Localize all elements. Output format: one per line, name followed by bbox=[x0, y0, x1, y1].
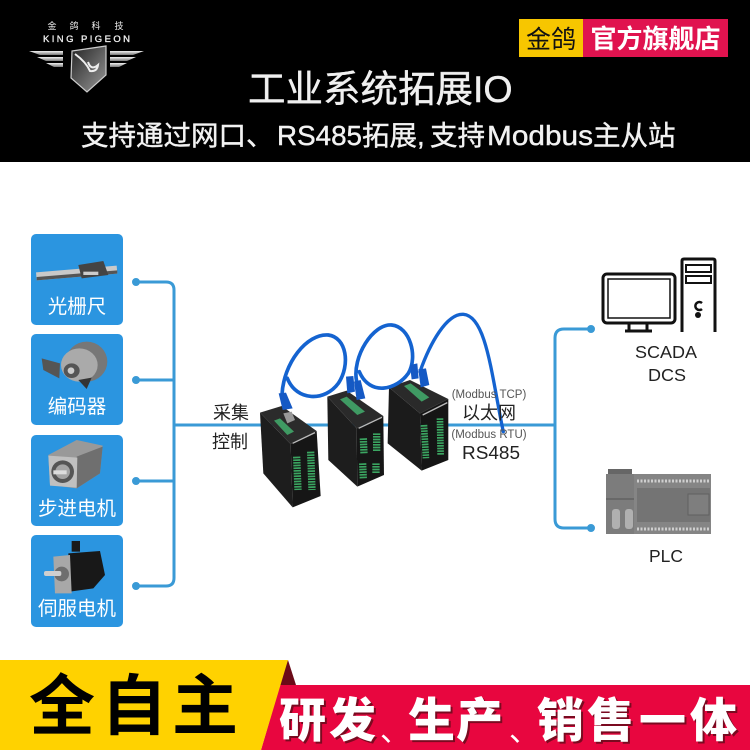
subtitle: 拓展, bbox=[362, 120, 425, 151]
cable connectors bbox=[279, 363, 429, 410]
slogan: R&D, production, sales bbox=[279, 694, 739, 749]
header band bbox=[0, 0, 750, 162]
subtitle: 支持通过网口、 bbox=[81, 120, 274, 151]
logo: King Pigeon bbox=[29, 20, 144, 92]
subtitle: 支持 bbox=[430, 120, 485, 151]
slogan: R&D, production, sales: 销售一体 bbox=[539, 696, 739, 749]
logo: King Pigeon: 金 bbox=[47, 20, 57, 31]
label: DCS: DCS bbox=[648, 365, 686, 385]
icon: SCADA computer bbox=[603, 259, 715, 332]
slogan: R&D, production, sales: 生产 bbox=[410, 696, 505, 749]
tile: servo motor: 伺服电机 bbox=[38, 598, 116, 620]
badge: official flagship store bbox=[519, 19, 728, 57]
logo: King Pigeon: 技 bbox=[114, 20, 124, 31]
blue cables bbox=[282, 314, 503, 432]
subtitle: 主从站 bbox=[593, 120, 676, 151]
tile: encoder bbox=[31, 334, 123, 425]
slogan: fully independent: 全自主 bbox=[29, 669, 238, 743]
slogan: R&D, production, sales: 、 bbox=[380, 715, 410, 748]
tile: grating scale: 光栅尺 bbox=[48, 296, 106, 318]
IO modules with blue network cables bbox=[260, 314, 503, 507]
slogan: R&D, production, sales: 销售一体 bbox=[537, 694, 737, 747]
left connector bracket bbox=[134, 280, 174, 588]
tile: grating scale bbox=[31, 234, 123, 325]
subtitle: Modbus bbox=[487, 120, 593, 151]
module 1 bbox=[260, 406, 321, 507]
slogan: R&D, production, sales: 研发 bbox=[281, 696, 378, 749]
tile: servo motor bbox=[31, 535, 123, 627]
bottom banner: red strip bbox=[261, 660, 750, 750]
module 3 bbox=[388, 380, 448, 471]
tile: stepper motor bbox=[31, 435, 123, 526]
label: acquisition: 采集 bbox=[213, 403, 249, 423]
badge: official flagship store: 金鸽 bbox=[526, 26, 576, 54]
label: RS485: RS485 bbox=[462, 442, 520, 463]
label: Modbus TCP: (Modbus TCP) bbox=[452, 389, 526, 401]
slogan: R&D, production, sales: 研发 bbox=[279, 694, 376, 747]
logo: King Pigeon: KING PIGEON bbox=[43, 34, 130, 45]
label: PLC: PLC bbox=[649, 546, 683, 566]
label: control: 控制 bbox=[212, 432, 248, 452]
logo: King Pigeon: 鸽 bbox=[69, 20, 79, 31]
label: SCADA: SCADA bbox=[635, 342, 697, 362]
title: 工业系统拓展IO bbox=[248, 68, 513, 110]
right connector bracket bbox=[555, 326, 594, 530]
tile: encoder: 编码器 bbox=[48, 396, 106, 418]
tile: stepper motor: 步进电机 bbox=[38, 498, 116, 520]
slogan: R&D, production, sales: 、 bbox=[509, 715, 539, 748]
subtitle: RS485 bbox=[277, 120, 362, 151]
icon: PLC bbox=[606, 469, 711, 534]
subtitle bbox=[81, 120, 676, 151]
slogan: R&D, production, sales: 生产 bbox=[408, 694, 503, 747]
label: Ethernet: 以太网 bbox=[462, 403, 516, 423]
module 2 bbox=[327, 391, 384, 487]
badge: official flagship store: 官方旗舰店 bbox=[590, 24, 721, 54]
bottom banner: yellow tab bbox=[0, 660, 288, 750]
label: Modbus RTU: (Modbus RTU) bbox=[451, 429, 527, 441]
logo: King Pigeon: 科 bbox=[91, 20, 101, 31]
main horizontal bus line bbox=[174, 424, 555, 426]
